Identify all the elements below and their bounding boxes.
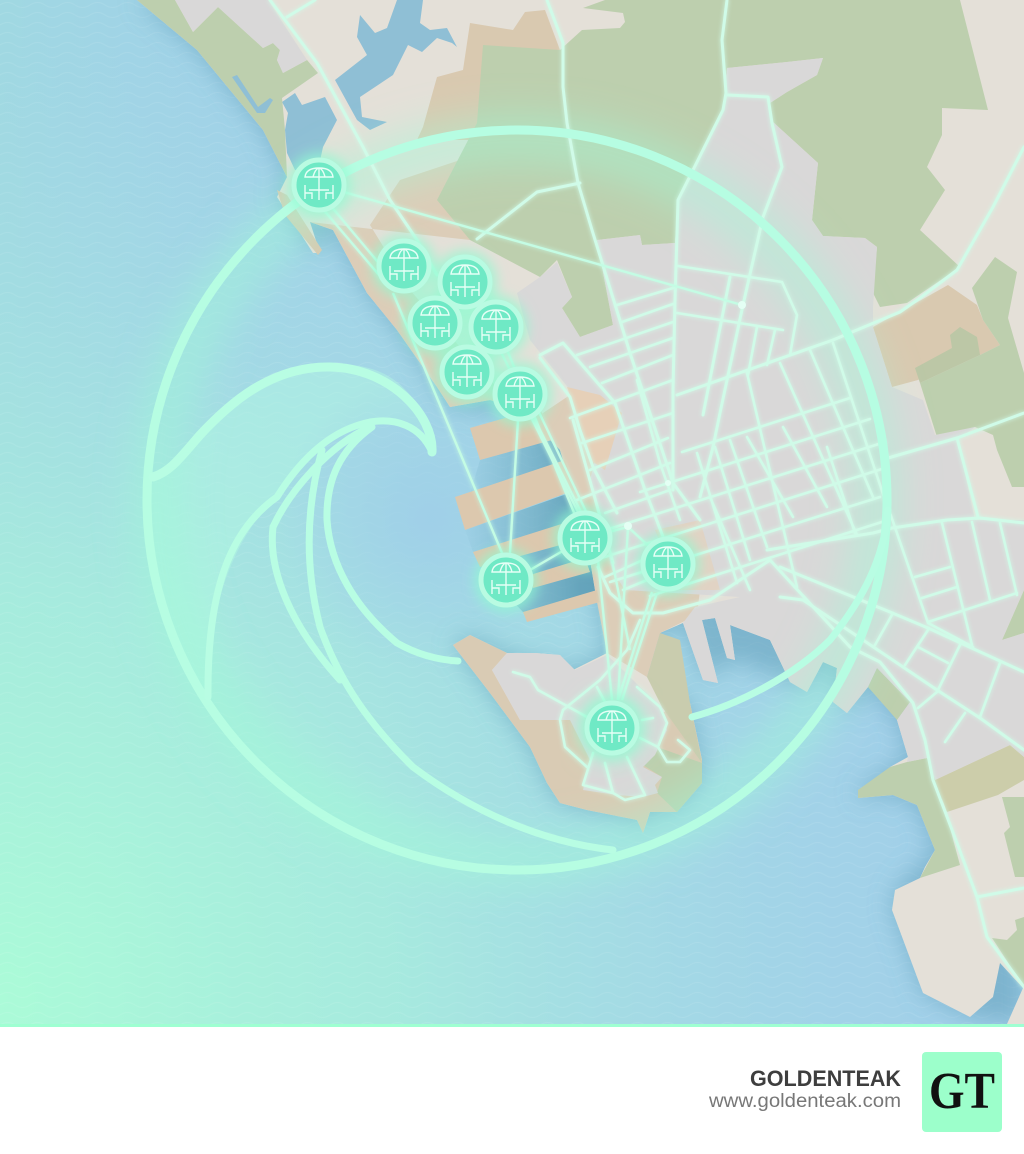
marker: pier cafe (481, 555, 531, 605)
sand spit (277, 190, 322, 255)
road network (270, 0, 1024, 987)
arterial roads (270, 0, 1024, 987)
ring glow (157, 140, 877, 860)
city nodes (624, 301, 746, 530)
marker: beach cafe 4 (471, 302, 521, 352)
inner curl (327, 427, 458, 661)
marker: beach cafe 6 (495, 369, 545, 419)
marker: beach cafe 1 (379, 241, 429, 291)
piers (455, 408, 600, 622)
brand website: www.goldenteak.com (708, 1091, 901, 1112)
green patches (137, 0, 1024, 987)
inland water (282, 0, 457, 170)
north west grid (570, 288, 673, 513)
peninsula glow around hub (576, 692, 648, 764)
wave outline (153, 367, 888, 850)
channel (232, 75, 273, 113)
south east roads (875, 513, 1017, 742)
olive patch (935, 745, 1024, 812)
wave body fill (150, 365, 432, 697)
gray urban areas (175, 0, 1024, 797)
darker green notch (915, 327, 980, 383)
logo: GT (929, 1063, 995, 1120)
marker: city cafe 1 (560, 513, 610, 563)
marker: beach cafe 3 (410, 298, 460, 348)
marker: beach cafe 5 (442, 347, 492, 397)
footer band (0, 1024, 1024, 1154)
pier slots (465, 436, 600, 612)
marker glows (287, 153, 700, 760)
brand name: GOLDENTEAK (750, 1066, 902, 1091)
marker: city cafe 2 (643, 539, 693, 589)
marker: northern cafe (294, 160, 344, 210)
under crest (208, 421, 432, 697)
tan patches (310, 10, 1000, 833)
wave crest (153, 367, 432, 477)
marker: beach cafe 2 (440, 257, 490, 307)
peninsula roads (513, 620, 690, 800)
peach patches near the city (567, 387, 720, 590)
land base (137, 0, 1024, 1024)
coastline shadow (137, 0, 1024, 1024)
right spiral arc (692, 510, 888, 717)
east grid (590, 398, 885, 596)
second fold (272, 427, 370, 680)
long swoosh (309, 450, 613, 850)
connection lines (319, 185, 742, 700)
main ring (147, 130, 887, 870)
land use patches (137, 0, 1024, 987)
marker: peninsula cafe (587, 703, 637, 753)
curl water tint (280, 370, 580, 670)
logo (922, 1052, 1002, 1132)
